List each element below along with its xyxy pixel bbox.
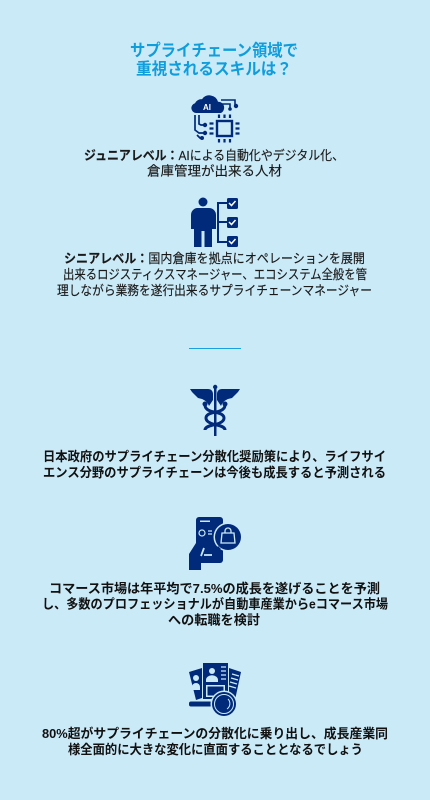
text: diversification: 様全面的に大きな変化に直面することとなるでしょう [68, 742, 363, 757]
icon: documents and magnifier [189, 663, 241, 718]
icon: AI cloud and chip [191, 95, 240, 142]
text: diversification: 80%超がサプライチェーンの分散化に乗り出し、成長産業同 [42, 726, 388, 741]
icon: person with checklist [191, 198, 238, 247]
icon: phone shopping [189, 517, 242, 570]
text: life science [43, 449, 386, 480]
text: diversification [42, 726, 388, 757]
text: life science: 日本政府のサプライチェーン分散化奨励策により、ライフサイ [43, 449, 386, 464]
text: e-commerce: への転職を検討 [168, 612, 260, 628]
text: junior level [84, 148, 344, 178]
text: e-commerce [42, 581, 388, 628]
text: e-commerce: コマース市場は年平均で7.5%の成長を遂げることを予測 [49, 581, 380, 596]
text: senior level: 出来るロジスティクスマネージャー、エコシステム全般を管 [63, 267, 367, 282]
text: senior level: 理しながら業務を遂行出来るサプライチェーンマネージャー [57, 283, 372, 298]
title: サプライチェーン領域で [130, 41, 298, 60]
text: senior level [57, 251, 372, 298]
title: 重視されるスキルは？ [136, 60, 292, 78]
icon: AI cloud and chip: AI [203, 103, 211, 112]
text: life science: エンス分野のサプライチェーンは今後も成長すると予測される [43, 465, 386, 480]
text: senior level: シニアレベル：国内倉庫を拠点にオペレーションを展開 [64, 251, 365, 266]
text: junior level: ジュニアレベル：AIによる自動化やデジタル化、 [84, 148, 344, 163]
title [130, 41, 298, 78]
icon: caduceus [190, 385, 240, 436]
text: e-commerce: し、多数のプロフェッショナルが自動車産業からeコマース市場 [42, 596, 388, 612]
text: junior level: 倉庫管理が出来る人材 [147, 164, 282, 178]
